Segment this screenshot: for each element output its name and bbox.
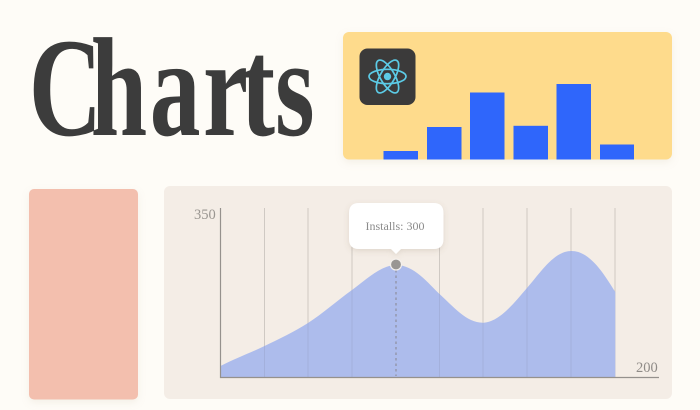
panel: area chart card xyxy=(164,186,672,399)
title: Charts xyxy=(29,10,315,166)
area chart xyxy=(220,251,615,378)
tooltip xyxy=(349,203,444,254)
chart axes xyxy=(220,208,659,378)
icon: React logo xyxy=(360,48,416,105)
x axis label: 200 xyxy=(636,360,658,376)
panel: yellow bar chart card xyxy=(343,32,672,161)
bar chart xyxy=(384,84,634,161)
tooltip: Installs: 300 xyxy=(366,219,424,233)
data point xyxy=(390,259,402,270)
dotted marker line xyxy=(395,270,397,376)
panel: pink card xyxy=(29,189,138,400)
y axis label: 350 xyxy=(194,207,216,223)
